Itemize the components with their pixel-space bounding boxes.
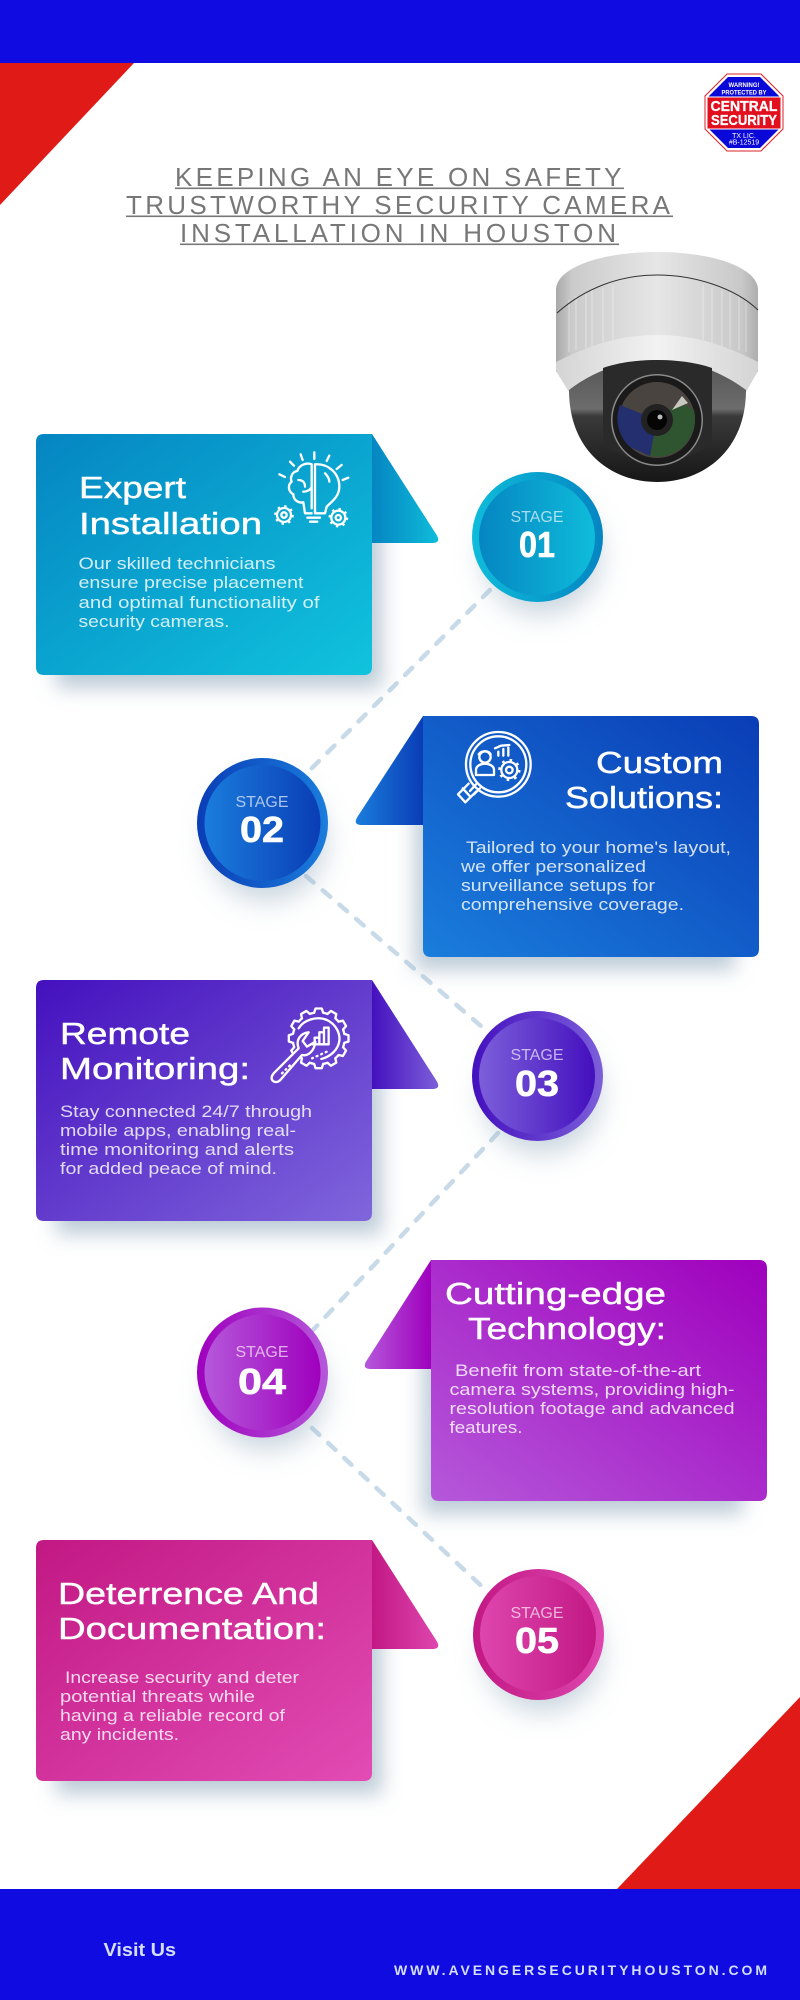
panel: cutting-edge technology [365, 1260, 767, 1501]
panel: remote monitoring [36, 980, 438, 1221]
dashed connector stage 3 to 4 [313, 1133, 498, 1330]
logo: central security badge: CENTRAL [710, 99, 778, 115]
dashed connector stage 4 to 5 [312, 1428, 488, 1592]
panel text: remote monitoring: for added peace of mind. [60, 1159, 277, 1178]
panel: cutting-edge technology: Technology: [468, 1311, 666, 1346]
panel text: custom solutions: Tailored to your home's layout, [466, 838, 731, 857]
red corner triangle top left [0, 63, 134, 205]
panel: deterrence and documentation: Documentation: [58, 1611, 326, 1646]
stage 02 badge: 02 [240, 809, 284, 850]
panel text: cutting-edge technology: resolution footage and advanced [450, 1399, 734, 1418]
stage 05 badge: STAGE [510, 1605, 564, 1622]
panel: expert installation: Installation [79, 506, 262, 541]
panel text: expert installation: Our skilled technicians [78, 554, 276, 573]
panel text: deterrence and documentation: Increase security and deter [65, 1668, 299, 1687]
stage 05 badge [473, 1569, 604, 1700]
panel: custom solutions [356, 716, 759, 957]
dashed connector stage 1 to 2 [308, 590, 490, 772]
website url: WWW.AVENGERSECURITYHOUSTON.COM [394, 1962, 767, 1978]
logo: central security badge: TX LIC. [732, 133, 756, 140]
stage 03 badge: 03 [515, 1063, 559, 1104]
panel: custom solutions: Custom [596, 745, 723, 780]
icon: magnifier with person and gear [458, 732, 531, 802]
panel: deterrence and documentation: Deterrence And [58, 1576, 319, 1611]
top blue bar [0, 0, 800, 63]
panel: expert installation [36, 434, 438, 675]
panel text: custom solutions: surveillance setups for [461, 876, 655, 895]
title: KEEPING AN EYE ON SAFETY [175, 162, 622, 192]
logo: central security badge: #B-12519 [729, 140, 759, 146]
panel: custom solutions: Solutions: [565, 780, 723, 815]
bottom blue bar [0, 1889, 800, 2000]
logo: central security badge [705, 74, 783, 151]
panel text: cutting-edge technology: Benefit from state-of-the-art [455, 1361, 701, 1380]
panel: deterrence and documentation [36, 1540, 438, 1781]
panel text: cutting-edge technology [450, 1361, 734, 1437]
panel text: expert installation [78, 554, 320, 631]
panel text: deterrence and documentation: any incidents. [60, 1725, 179, 1744]
stage 02 badge [197, 758, 328, 888]
title: INSTALLATION IN HOUSTON [180, 218, 616, 248]
panel text: remote monitoring [60, 1102, 312, 1178]
panel text: cutting-edge technology: camera systems, providing high- [450, 1380, 734, 1399]
title: TRUSTWORTHY SECURITY CAMERA [126, 190, 671, 220]
stage 04 badge: 04 [238, 1361, 286, 1402]
panel text: expert installation: ensure precise placement [78, 573, 304, 592]
title [126, 162, 673, 248]
panel text: custom solutions: comprehensive coverage. [461, 895, 684, 914]
panel: remote monitoring: Monitoring: [60, 1051, 250, 1086]
panel text: deterrence and documentation [60, 1668, 299, 1744]
stage 01 badge [472, 472, 603, 602]
stage 04 badge: STAGE [236, 1344, 288, 1361]
panel text: cutting-edge technology: features. [450, 1418, 522, 1437]
logo: central security badge: PROTECTED BY [722, 90, 766, 96]
icon: brain light bulb with gears [275, 452, 348, 526]
panel text: expert installation: security cameras. [78, 612, 230, 631]
stage 01 badge: STAGE [510, 509, 564, 526]
stage 02 badge: STAGE [236, 794, 288, 811]
panel text: deterrence and documentation: potential threats while [60, 1687, 255, 1706]
logo: central security badge: WARNING! [728, 83, 760, 89]
stage 01 badge: 01 [519, 524, 555, 565]
red corner triangle bottom right [617, 1697, 800, 1889]
dome security camera illustration [556, 252, 758, 482]
panel text: remote monitoring: Stay connected 24/7 through [60, 1102, 312, 1121]
panel text: expert installation: and optimal functionality of [78, 593, 320, 612]
panel text: custom solutions [460, 838, 731, 914]
dashed connector stage 2 to 3 [306, 876, 488, 1032]
icon: wrench and gear with bar chart [272, 1008, 349, 1082]
panel text: remote monitoring: time monitoring and alerts [60, 1140, 294, 1159]
stage 03 badge: STAGE [510, 1047, 564, 1064]
visit us label: Visit Us [104, 1939, 176, 1960]
panel: cutting-edge technology: Cutting-edge [445, 1276, 666, 1311]
panel: expert installation: Expert [79, 470, 186, 505]
logo: central security badge: SECURITY [711, 113, 777, 129]
panel text: custom solutions: we offer personalized [460, 857, 646, 876]
stage 03 badge [472, 1011, 603, 1141]
panel text: deterrence and documentation: having a reliable record of [60, 1706, 285, 1725]
panel: remote monitoring: Remote [60, 1016, 190, 1051]
stage 04 badge [197, 1308, 328, 1438]
stage 05 badge: 05 [515, 1620, 559, 1661]
panel text: remote monitoring: mobile apps, enabling real- [60, 1121, 296, 1140]
